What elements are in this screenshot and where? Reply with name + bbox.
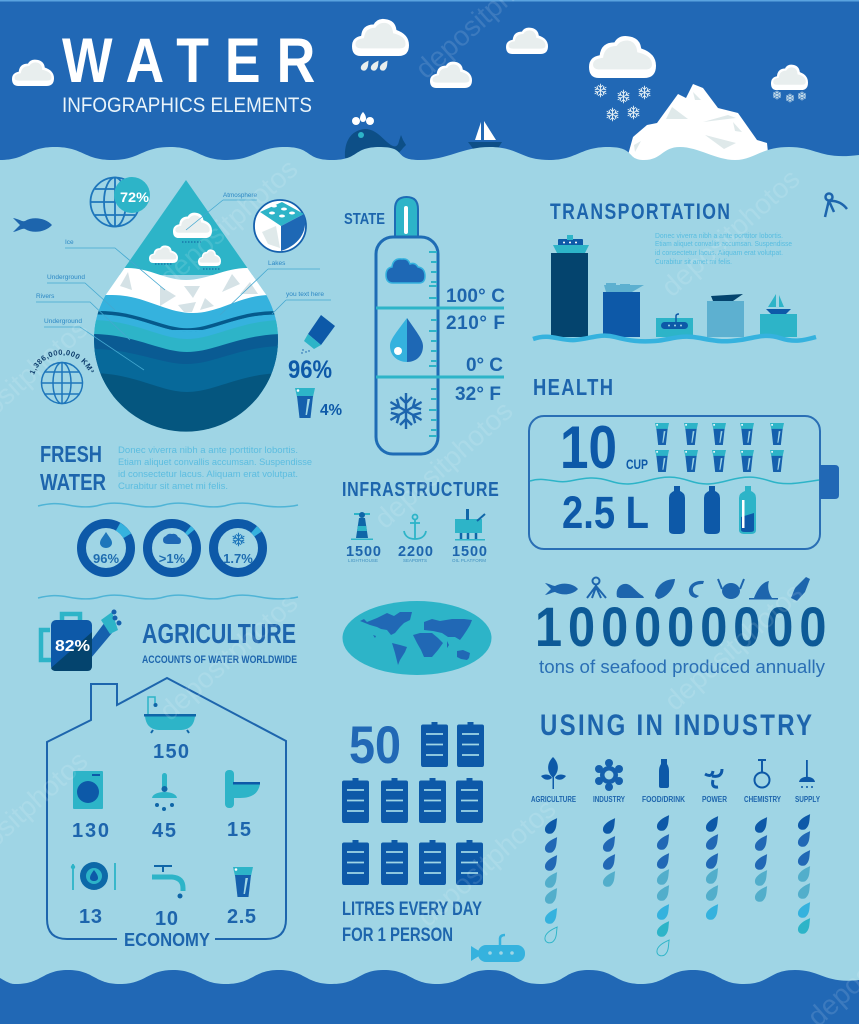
donut 96%: 96%	[93, 551, 119, 566]
icon: submarine	[661, 314, 688, 329]
donut 1.7%	[214, 524, 262, 572]
icon: mussel	[655, 579, 675, 599]
text: 32 F: 32° F	[455, 384, 501, 405]
label: Lakes: Lakes	[268, 260, 286, 267]
panel: house economy	[47, 678, 286, 950]
caption: tons of seafood produced annually	[539, 657, 825, 677]
icon: oil platform	[455, 509, 485, 540]
label: Underground lower: Underground	[44, 318, 82, 325]
body text: Etiam aliquet convallis accumsan. Suspendisse	[118, 457, 312, 468]
icon: cloud left in drop	[149, 245, 178, 263]
icon: globe 72%: 72%	[120, 189, 150, 205]
label: cup: CUP	[626, 456, 648, 472]
icon: sailboat	[468, 121, 502, 150]
panel: agriculture	[41, 610, 297, 671]
icon: large cloud	[173, 213, 212, 238]
number: 45: 45	[152, 820, 176, 842]
icon: bath	[144, 697, 196, 733]
heading: state: STATE	[344, 211, 385, 228]
text: 0 C: 0° C	[466, 355, 503, 376]
icon: cloud	[386, 259, 425, 283]
label: Underground upper: Underground	[47, 274, 85, 281]
text: 210 F: 210° F	[446, 313, 505, 334]
battery nub	[820, 465, 839, 499]
icon: cloud centre	[430, 62, 472, 88]
label: Ice: Ice	[65, 239, 74, 246]
watermarks: depositphotos	[658, 577, 809, 716]
heading: HEALTH	[533, 375, 613, 401]
title: WATER	[62, 26, 315, 96]
icon: shower	[152, 773, 177, 811]
subheading: ACCOUNTS OF WATER WORLDWIDE	[142, 654, 297, 666]
panel: fresh water	[38, 441, 312, 599]
panel: bottom water	[0, 970, 859, 1024]
icon: whale	[617, 584, 644, 598]
icon: cloud left	[12, 60, 54, 86]
body text: Curabitur sit amet mi felis.	[655, 257, 732, 266]
icon: globe volume: 1,386,000,000 KM³	[30, 350, 94, 374]
label: Rivers: Rivers	[36, 293, 55, 300]
icon: cloud right in drop	[198, 249, 221, 266]
number: 10: 10	[155, 908, 178, 930]
number: 150: 150	[153, 741, 189, 763]
number: platforms: 1500	[452, 544, 487, 560]
labels: POWER	[702, 795, 727, 804]
body text: id consectetur lacus. Aliquam erat volutpat.	[118, 469, 298, 480]
icon: rain cloud	[352, 19, 409, 71]
number: 13: 13	[79, 906, 102, 928]
icon: snowflake	[387, 393, 425, 429]
thermometer	[376, 197, 504, 454]
watermarks: depositphotos	[368, 395, 519, 534]
donut >1%	[148, 524, 196, 572]
label: Atmosphere: Atmosphere	[223, 192, 257, 199]
divider lines	[376, 308, 504, 377]
drops: industry	[603, 818, 615, 887]
panel: health	[529, 375, 839, 549]
bar chart	[551, 253, 797, 337]
number: 10: 10	[560, 414, 617, 481]
heading: TRANSPORTATION	[550, 200, 730, 225]
labels: FOOD/DRINK	[642, 795, 685, 804]
icon: watering can: 82%	[55, 638, 90, 655]
icon: cruise ship	[553, 235, 589, 253]
number: 100000000	[535, 596, 826, 659]
subtitle: INFOGRAPHICS ELEMENTS	[62, 94, 312, 117]
icon: bottle	[659, 759, 669, 788]
battery icons	[342, 722, 484, 885]
battery outline	[529, 416, 820, 549]
icon: iceberg	[626, 84, 769, 162]
panel: seafood	[535, 577, 826, 677]
panel: water top wave	[0, 147, 859, 200]
icon: glass	[233, 867, 253, 897]
icon: water drop	[390, 318, 423, 362]
heading: USING IN INDUSTRY	[540, 707, 812, 742]
watermarks: depositphotos	[153, 587, 304, 726]
label: lighthouse: LIGHTHOUSE	[348, 558, 378, 563]
body text	[655, 231, 792, 266]
icon: shrimp	[689, 581, 704, 598]
icon: washing machine	[73, 771, 103, 809]
seafood icons	[545, 577, 810, 601]
watermarks: depositphotos	[411, 793, 562, 932]
drop diagram	[90, 175, 285, 435]
panel: transportation	[533, 200, 816, 341]
icon: toilet	[225, 770, 260, 808]
icon: whale	[345, 112, 406, 158]
heading: fresh: FRESH	[40, 441, 102, 467]
label: seaports: SEAPORTS	[403, 558, 427, 563]
icon: shark fin	[749, 581, 778, 600]
text: 100 C: 100° C	[446, 286, 505, 307]
number: 2.5 L: 2.5 L	[562, 487, 649, 538]
house outline	[47, 678, 286, 939]
body text: Donec viverra nibh a ante porttitor lobortis.	[655, 231, 783, 240]
caption line 1: LITRES EVERY DAY	[342, 899, 482, 920]
icon: tap	[152, 866, 183, 898]
icon: submarine bottom	[471, 935, 525, 962]
panel: infrastructure	[342, 478, 499, 563]
labels: SUPPLY	[795, 795, 821, 804]
wave lines	[38, 503, 298, 599]
icon: flask	[754, 760, 770, 788]
label: economy: ECONOMY	[124, 930, 210, 950]
drops: supply	[798, 814, 810, 934]
icon: ball water cube	[254, 200, 306, 252]
icon: cloud top centre	[506, 28, 548, 54]
number: 50: 50	[349, 716, 401, 775]
world map	[342, 601, 492, 675]
icon: plate	[71, 862, 115, 890]
icon: cup	[295, 388, 315, 418]
watermarks: depositphotos	[655, 163, 806, 302]
donut >1%: >1%	[159, 551, 186, 566]
icon: octopus top right	[825, 194, 847, 217]
icon: small snow cloud	[771, 65, 808, 102]
panel: using in industry	[531, 707, 821, 956]
icon: crab	[718, 579, 744, 599]
callout lines	[36, 200, 331, 370]
number: seaports: 2200	[398, 544, 433, 560]
donut 96%	[82, 524, 130, 572]
body text: Curabitur sit amet mi felis.	[118, 481, 228, 492]
icon: power	[705, 769, 722, 787]
labels: INDUSTRY	[593, 795, 626, 804]
labels: AGRICULTURE	[531, 795, 577, 804]
icon: watering can	[41, 610, 122, 671]
icon: squid	[791, 577, 810, 601]
icon: cargo ship	[604, 283, 644, 292]
icon: lighthouse	[351, 512, 373, 540]
heading: INFRASTRUCTURE	[342, 478, 499, 500]
icon: fish	[13, 218, 52, 232]
watermarks: depositphotos	[153, 153, 304, 292]
panel: sky header	[0, 0, 859, 162]
number: 130: 130	[72, 820, 109, 842]
panel: water cycle drop	[90, 175, 285, 435]
rain marks	[155, 242, 220, 269]
icon: anchor	[404, 514, 426, 539]
body text: id consectetur lacus. Aliquam erat volutpat.	[655, 248, 783, 257]
drops: power	[706, 816, 718, 920]
wave	[533, 336, 816, 341]
labels: CHEMISTRY	[744, 795, 782, 804]
drops: food and drink	[657, 815, 669, 956]
panel: litres per person	[342, 716, 484, 946]
text: 4%: 4%	[320, 402, 342, 419]
icon: gear flower	[595, 759, 623, 791]
icon: globe volume	[30, 350, 94, 404]
icon: speedboat	[711, 294, 743, 301]
label: oil platform: OIL PLATFORM	[452, 558, 486, 563]
label: you text here: you text here	[286, 291, 324, 298]
number: 15: 15	[227, 819, 251, 841]
text: 96%: 96%	[288, 356, 332, 384]
icon: globe 72%	[90, 177, 150, 227]
icon: salt shaker	[301, 315, 335, 354]
drops: chemistry	[755, 817, 767, 902]
cups	[655, 423, 784, 472]
icon: supply shower	[799, 760, 815, 788]
bottles	[669, 486, 756, 534]
caption line 2: FOR 1 PERSON	[342, 925, 453, 946]
wave	[530, 477, 819, 484]
heading: AGRICULTURE	[142, 618, 296, 649]
body text	[118, 445, 312, 492]
number: 2.5: 2.5	[227, 906, 256, 928]
heading: water: WATER	[40, 469, 106, 495]
donut 1.7%: 1.7%	[223, 551, 253, 566]
body text: Donec viverra nibh a ante porttitor lobortis.	[118, 445, 298, 456]
drops: agriculture	[545, 818, 557, 943]
number: lighthouse: 1500	[346, 544, 381, 560]
body text: Etiam aliquet convallis accumsan. Suspendisse	[655, 239, 792, 248]
icon: small sailboat	[766, 294, 791, 314]
icon: plant	[541, 757, 566, 789]
icon: snow cloud	[589, 36, 656, 121]
ticks	[429, 252, 437, 436]
icon: octopus	[587, 578, 606, 598]
labels	[531, 795, 821, 804]
icon: fish	[545, 583, 578, 595]
